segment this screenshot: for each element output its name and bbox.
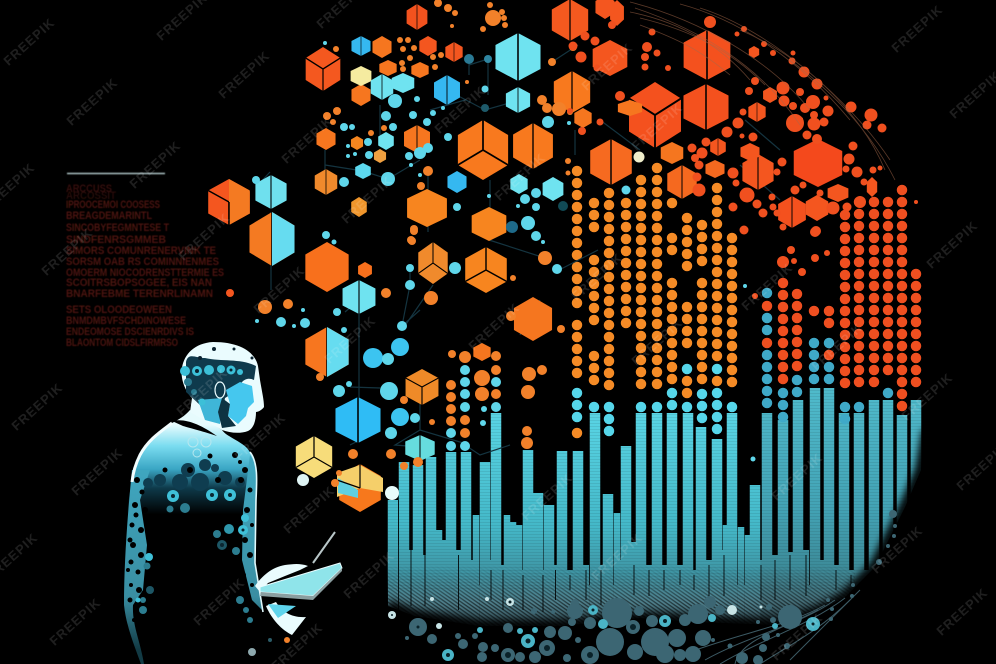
hexagon cloud: cyan and yellow hexagons — [255, 33, 563, 498]
collar — [172, 420, 217, 436]
cyan dot segments — [577, 369, 732, 434]
hands — [255, 564, 308, 592]
red dot columns — [767, 190, 916, 408]
caption rule and garbled text block: OMOERM NIOCODRENSTTERMIE ES — [66, 267, 224, 279]
face — [226, 382, 254, 424]
FREEPIK watermarks: FREEPIK — [321, 313, 379, 366]
FREEPIK watermarks: FREEPIK — [190, 575, 248, 628]
caption rule and garbled text block: BNARFEBME TERENRLINAMN — [66, 288, 213, 300]
bar chart: teal vertical bars — [388, 388, 923, 640]
FREEPIK watermarks: FREEPIK — [340, 548, 398, 601]
caption rule and garbled text block: BREAGDEMARINTL — [66, 210, 152, 222]
cyan circles — [252, 41, 756, 500]
FREEPIK watermarks: FREEPIK — [46, 595, 104, 648]
FREEPIK watermarks: FREEPIK — [923, 218, 981, 271]
caption rule and garbled text block: SETS OLOODEOWEEN — [66, 304, 172, 316]
laptop — [260, 532, 342, 600]
caption rule and garbled text block: BNMDMBVFSCHDINOWESE — [66, 315, 186, 327]
caption rule and garbled text block: SIMORS COMUNRENERVINK TE — [66, 245, 216, 257]
FREEPIK watermarks: FREEPIK — [38, 225, 96, 278]
FREEPIK watermarks: FREEPIK — [278, 113, 336, 166]
FREEPIK watermarks: FREEPIK — [465, 300, 523, 353]
FREEPIK watermarks: FREEPIK — [175, 210, 233, 263]
caption rule and garbled text block: ENDEOMOSE DSCIENRDIVS IS — [66, 326, 194, 338]
curved strands bottom right — [690, 590, 860, 664]
right arm edge strip — [242, 455, 262, 610]
caption rule and garbled text block — [66, 174, 224, 349]
connector lines of the hexagon network — [258, 45, 780, 455]
orange dot columns — [577, 168, 732, 445]
stray dots near the person — [284, 637, 290, 643]
FREEPIK watermarks: FREEPIK — [518, 470, 576, 523]
FREEPIK watermarks: FREEPIK — [628, 100, 686, 153]
copper arc strands top right — [630, 2, 895, 180]
caption rule and garbled text block: SINDFENRSGMMEB — [66, 234, 166, 246]
body dots — [126, 452, 254, 622]
orange circles — [226, 0, 577, 487]
FREEPIK watermarks: FREEPIK — [888, 2, 946, 55]
FREEPIK watermarks: FREEPIK — [280, 483, 338, 536]
FREEPIK watermarks: FREEPIK — [491, 150, 549, 203]
FREEPIK watermarks: FREEPIK — [578, 40, 636, 93]
FREEPIK watermarks: FREEPIK — [933, 585, 991, 638]
caption rule and garbled text block: ARCOSSIT — [66, 190, 116, 202]
FREEPIK watermarks: FREEPIK — [768, 610, 826, 663]
FREEPIK watermarks: FREEPIK — [568, 250, 626, 303]
FREEPIK watermarks: FREEPIK — [628, 315, 686, 368]
red circles — [567, 16, 918, 299]
FREEPIK watermarks: FREEPIK — [231, 410, 289, 463]
caption rule and garbled text block: BLAONTOM CIDSLFIRMRSO — [66, 337, 178, 349]
FREEPIK watermarks: FREEPIK — [768, 450, 826, 503]
head — [182, 342, 264, 433]
bottom circle cluster — [388, 510, 897, 664]
caption rule and garbled text block: SORSM OAB RS COMINNIENMES — [66, 256, 219, 268]
FREEPIK watermarks: FREEPIK — [126, 138, 184, 191]
caption rule and garbled text block: SCOITRSBOPSOGEE, EIS NAN — [66, 277, 212, 289]
FREEPIK watermarks: FREEPIK — [8, 380, 66, 433]
bar texture overlay — [385, 385, 928, 630]
FREEPIK watermarks: FREEPIK — [338, 173, 396, 226]
left arm speckle strip — [124, 470, 150, 664]
FREEPIK watermarks: FREEPIK — [588, 530, 646, 583]
torso blotches — [143, 459, 245, 491]
caption rule and garbled text block: ARCCUSS — [66, 183, 112, 195]
FREEPIK watermarks: FREEPIK — [173, 365, 231, 418]
FREEPIK watermarks: FREEPIK — [431, 83, 489, 136]
hair — [186, 356, 256, 415]
FREEPIK watermarks: FREEPIK — [868, 523, 926, 576]
FREEPIK watermarks: FREEPIK — [250, 263, 308, 316]
person with laptop — [123, 342, 342, 664]
ring centres — [391, 600, 814, 658]
body silhouette — [123, 410, 275, 664]
FREEPIK watermarks: FREEPIK — [63, 75, 121, 128]
FREEPIK watermarks: FREEPIK — [68, 445, 126, 498]
FREEPIK watermarks: FREEPIK — [215, 48, 273, 101]
hexagon cloud: orange and red hexagons — [208, 0, 877, 512]
FREEPIK watermarks: FREEPIK — [0, 15, 58, 68]
caption rule and garbled text block: SINCOBYFEGMNTESE T — [66, 222, 169, 234]
FREEPIK watermarks: FREEPIK — [898, 370, 956, 423]
blue dot segments — [767, 293, 888, 421]
FREEPIK watermarks: FREEPIK — [808, 320, 866, 373]
caption rule and garbled text block: IPROOCEMOI COOSESS — [66, 199, 160, 211]
FREEPIK watermarks: FREEPIK — [738, 260, 796, 313]
